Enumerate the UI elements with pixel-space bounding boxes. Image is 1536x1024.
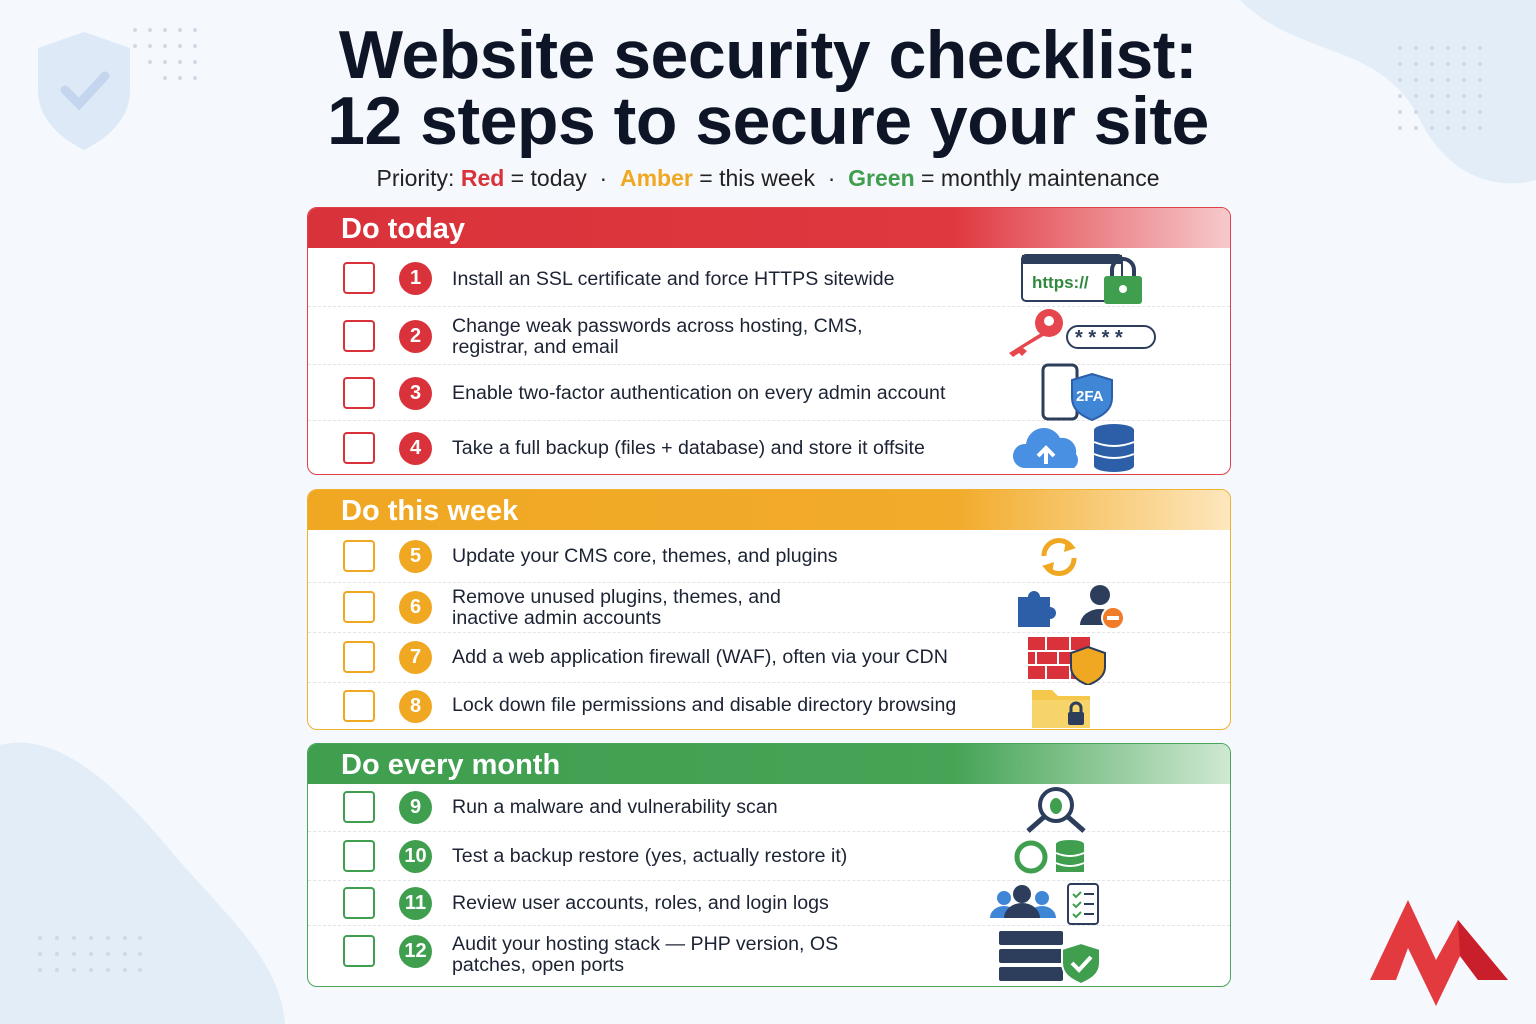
icon: users and checklist <box>990 883 1099 925</box>
icon: https lock: https:// <box>1032 273 1089 292</box>
panel: do every month: Review user accounts, roles, and login logs <box>452 892 829 914</box>
icon: key and password <box>1009 309 1156 357</box>
icon: servers shield <box>999 931 1100 983</box>
panel: do today: 2 <box>410 325 421 347</box>
panel: do this week: 8 <box>410 695 421 717</box>
icon: restore database <box>1014 840 1084 874</box>
heading: do this week <box>308 490 1230 530</box>
panel: do every month: Run a malware and vulnerability scan <box>452 796 778 818</box>
panel: do this week: Remove unused plugins, themes, and <box>452 586 781 608</box>
panel: do this week: Add a web application firewall (WAF), often via your CDN <box>452 646 948 668</box>
icon: firewall shield <box>1028 637 1106 685</box>
panel: do this week: 5 <box>410 545 421 567</box>
heading: do today <box>308 208 1230 248</box>
panel: do today: Take a full backup (files + database) and store it offsite <box>452 437 925 459</box>
subtitle legend: Priority: Red = today · Amber = this week · Green = monthly maintenance <box>376 165 1160 191</box>
panel: do this week: inactive admin accounts <box>452 607 661 629</box>
panel: do every month: 9 <box>410 796 421 818</box>
logo <box>1370 900 1508 1006</box>
panel: do every month: Test a backup restore (yes, actually restore it) <box>452 845 847 867</box>
icon: refresh <box>1042 538 1076 576</box>
heading: do today: Do today <box>341 213 465 245</box>
icon: decorative shield <box>38 32 130 150</box>
panel: do this week <box>307 489 1231 730</box>
icon: https lock <box>1021 254 1142 304</box>
icon: magnifier bug <box>1026 787 1086 833</box>
panel: do every month <box>307 743 1231 987</box>
panel: do every month: 10 <box>404 845 427 867</box>
panel: do this week: 7 <box>410 646 421 668</box>
panel: do today <box>307 207 1231 475</box>
panel: do this week: Update your CMS core, themes, and plugins <box>452 545 838 567</box>
panel: do every month: 12 <box>404 940 427 962</box>
title: Website security checklist: <box>339 17 1197 93</box>
icon: 2FA phone: 2FA <box>1076 388 1104 405</box>
icon: locked folder <box>1032 690 1090 728</box>
panel: do today: Change weak passwords across hosting, CMS, <box>452 315 863 337</box>
panel: do every month: Audit your hosting stack — PHP version, OS <box>452 933 838 955</box>
panel: do today: 3 <box>410 382 421 404</box>
panel: do today: Enable two-factor authentication on every admin account <box>452 382 945 404</box>
panel: do today: 1 <box>410 267 421 289</box>
icon: cloud and database <box>1012 424 1134 472</box>
icon: key and password: * * * * <box>1075 327 1123 349</box>
icon: puzzle and user remove <box>1018 585 1123 628</box>
title <box>327 17 1209 159</box>
heading: do every month <box>308 744 1230 784</box>
panel: do every month: patches, open ports <box>452 954 624 976</box>
panel: do every month: 11 <box>405 892 426 914</box>
panel: do today: Install an SSL certificate and force HTTPS sitewide <box>452 268 895 290</box>
panel: do this week: 6 <box>410 596 421 618</box>
heading: do this week: Do this week <box>341 495 518 527</box>
title: 12 steps to secure your site <box>327 83 1209 159</box>
icon: 2FA phone <box>1042 364 1113 422</box>
panel: do this week: Lock down file permissions and disable directory browsing <box>452 694 956 716</box>
panel: do today: 4 <box>410 437 421 459</box>
heading: do every month: Do every month <box>341 749 560 781</box>
panel: do today: registrar, and email <box>452 336 619 358</box>
